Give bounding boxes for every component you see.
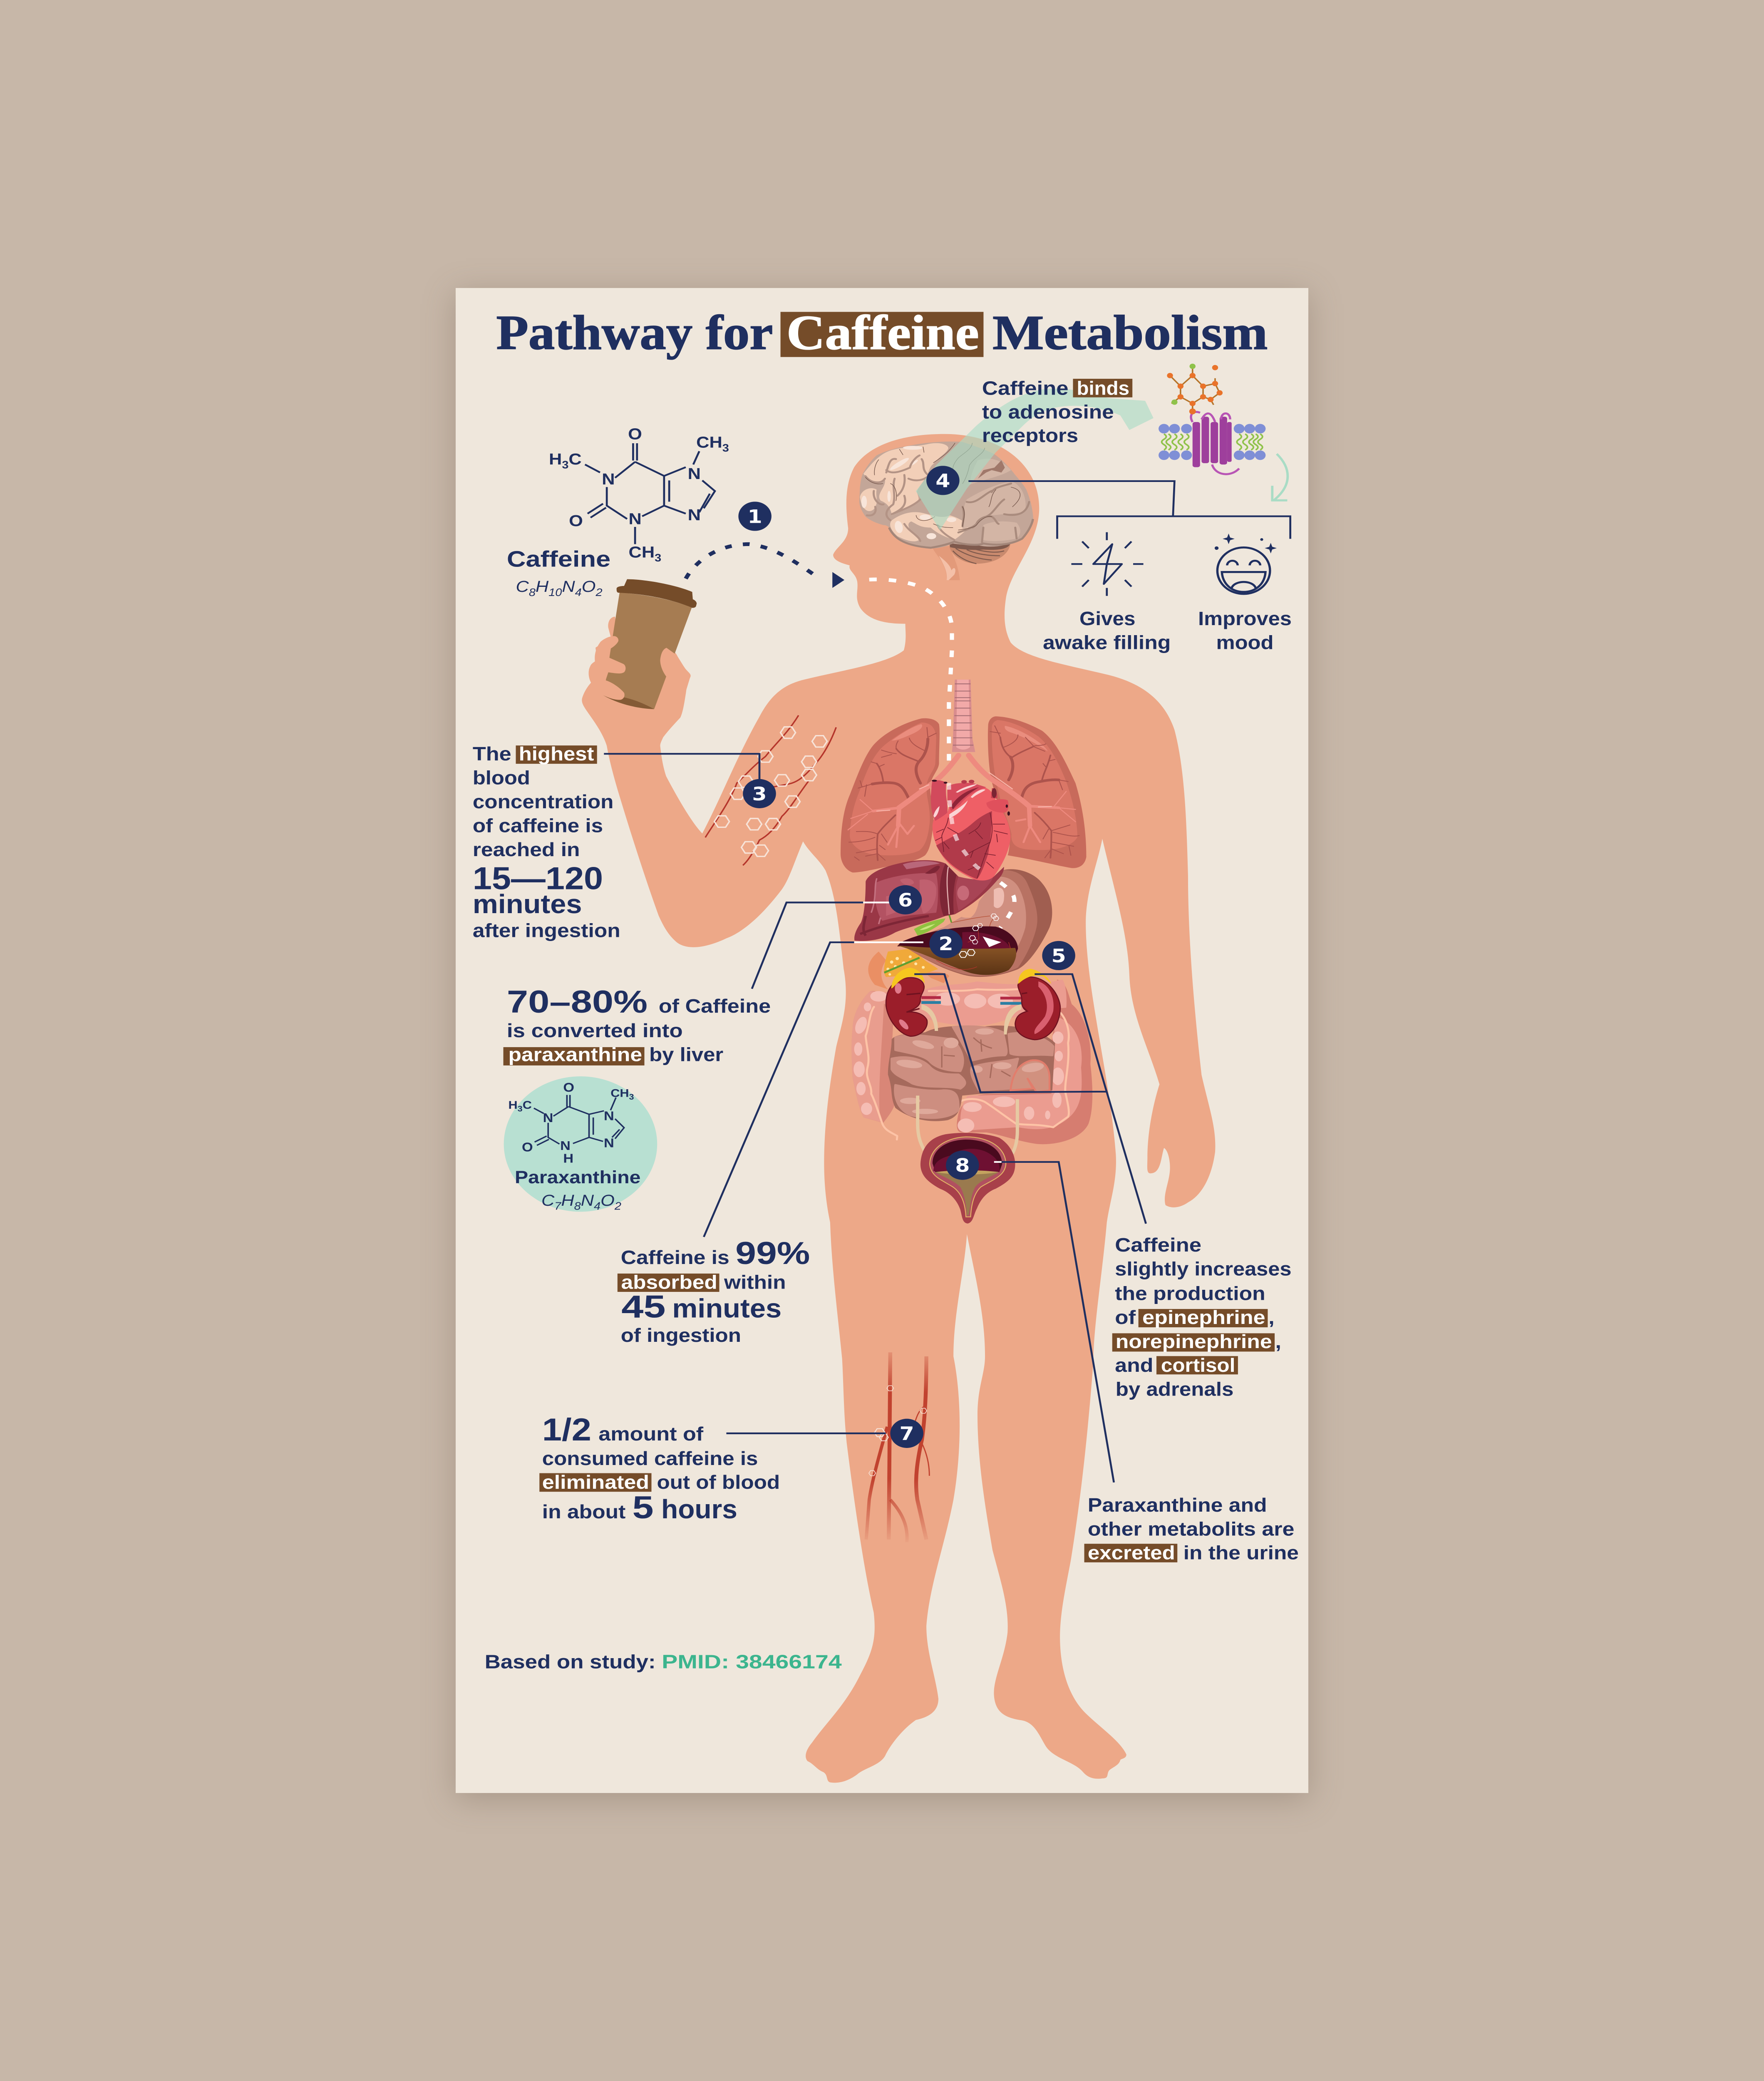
text: 70-80 percent converted bbox=[504, 984, 771, 1065]
text: half-life: in about bbox=[542, 1502, 625, 1522]
caffeine label and formula: 2 bbox=[595, 586, 603, 598]
text: adrenal hormones bbox=[1112, 1235, 1292, 1400]
text: half-life: eliminated bbox=[542, 1472, 649, 1493]
caffeine label and formula bbox=[507, 547, 610, 598]
panel: paraxanthine molecule: O bbox=[522, 1140, 533, 1154]
icon: smiling face bbox=[1215, 534, 1277, 594]
organ: stomach bbox=[897, 869, 1052, 977]
badge 2 bbox=[929, 929, 963, 958]
caffeine molecule structure: O bbox=[628, 425, 642, 443]
caffeine label and formula: 4 bbox=[575, 586, 582, 598]
icon: caffeine ball-and-stick molecule bbox=[1167, 364, 1223, 415]
organ: brain bbox=[859, 442, 1033, 580]
caffeine molecule structure: 3 bbox=[722, 442, 729, 454]
text: gives awake filling: Gives bbox=[1079, 608, 1135, 629]
panel: paraxanthine molecule: H bbox=[561, 1191, 574, 1209]
badge 1: 1 bbox=[748, 506, 762, 528]
panel: paraxanthine molecule: CH bbox=[610, 1087, 629, 1100]
badge 5: 5 bbox=[1052, 946, 1066, 967]
icon: adenosine receptor bbox=[1159, 412, 1265, 474]
text: half-life: 5 bbox=[633, 1490, 654, 1525]
panel: paraxanthine molecule: 3 bbox=[518, 1105, 523, 1113]
text: 99 percent absorbed: Caffeine is bbox=[621, 1247, 729, 1268]
badge 4 bbox=[926, 466, 960, 495]
caffeine label and formula: C bbox=[516, 578, 529, 596]
icon: lightning bolt with rays bbox=[1071, 532, 1144, 596]
arrow: swallowing path through the body bbox=[869, 579, 1015, 928]
caffeine molecule structure: O bbox=[569, 512, 583, 529]
arrow: receptor to effects bbox=[1272, 454, 1288, 500]
title: Caffeine bbox=[786, 306, 979, 360]
title: Metabolism bbox=[992, 306, 1268, 360]
caffeine molecule structure: N bbox=[629, 510, 642, 528]
text: highest blood concentration: blood bbox=[473, 767, 530, 789]
arm veins with caffeine molecules bbox=[705, 715, 836, 865]
text: caffeine binds to adenosine receptors: receptors bbox=[982, 425, 1078, 446]
caffeine molecule structure: N bbox=[688, 465, 701, 483]
text: half-life bbox=[539, 1412, 780, 1525]
organ: gallbladder bbox=[914, 915, 951, 936]
caffeine molecule structure: N bbox=[688, 506, 701, 524]
text: 70-80 percent converted: is converted into bbox=[507, 1021, 683, 1041]
panel: paraxanthine molecule: O bbox=[563, 1080, 574, 1094]
badge 1 bbox=[738, 502, 772, 531]
organ: heart bbox=[931, 780, 1010, 881]
text: 99 percent absorbed: 99% bbox=[735, 1236, 810, 1271]
panel: paraxanthine molecule: 2 bbox=[614, 1200, 621, 1212]
text: source citation bbox=[485, 1651, 842, 1673]
organ: pancreas and duodenum bbox=[868, 948, 949, 989]
panel: paraxanthine molecule: N bbox=[604, 1136, 614, 1150]
organ: bladder bbox=[920, 1133, 1015, 1224]
arrow: ingestion path from cup to mouth bbox=[686, 544, 844, 588]
text: caffeine binds to adenosine receptors: to adenosine bbox=[982, 402, 1114, 423]
text: gives awake filling bbox=[1043, 608, 1171, 653]
human body silhouette bbox=[582, 434, 1215, 1783]
panel: paraxanthine molecule: C bbox=[541, 1191, 554, 1209]
text: caffeine binds to adenosine receptors: binds bbox=[1077, 378, 1129, 399]
text: improves mood: Improves bbox=[1198, 608, 1292, 629]
panel: paraxanthine molecule: N bbox=[543, 1111, 553, 1125]
caffeine label and formula: Caffeine bbox=[507, 547, 610, 572]
text: excreted in urine bbox=[1084, 1495, 1299, 1564]
panel: paraxanthine molecule: N bbox=[581, 1191, 594, 1209]
panel: paraxanthine molecule: C bbox=[523, 1099, 532, 1112]
panel: paraxanthine molecule: N bbox=[560, 1139, 571, 1153]
badge 3: 3 bbox=[752, 784, 767, 805]
text: gives awake filling: awake filling bbox=[1043, 632, 1171, 653]
text: highest blood concentration: after ingestion bbox=[473, 920, 620, 941]
badge 7 bbox=[890, 1419, 923, 1448]
coffee cup in hand bbox=[590, 579, 697, 711]
text: highest blood concentration: minutes bbox=[473, 889, 582, 919]
caffeine label and formula: H bbox=[536, 578, 549, 596]
badge 6 bbox=[889, 885, 922, 914]
panel: paraxanthine molecule: 4 bbox=[594, 1200, 600, 1212]
text: half-life: hours bbox=[661, 1495, 737, 1524]
caffeine molecule structure: 3 bbox=[562, 459, 568, 471]
title: Pathway for bbox=[496, 306, 773, 360]
panel: paraxanthine molecule: N bbox=[604, 1109, 614, 1123]
text: 99 percent absorbed: absorbed bbox=[621, 1272, 717, 1293]
panel: paraxanthine molecule: Paraxanthine bbox=[515, 1167, 640, 1187]
text: caffeine binds to adenosine receptors bbox=[982, 378, 1132, 446]
text: adrenal hormones: , bbox=[1275, 1331, 1281, 1352]
panel: paraxanthine molecule: O bbox=[600, 1191, 615, 1209]
badge 7: 7 bbox=[900, 1423, 914, 1445]
text: adrenal hormones: norepinephrine bbox=[1116, 1331, 1272, 1352]
text: adrenal hormones: , bbox=[1268, 1307, 1275, 1328]
caffeine label and formula: N bbox=[562, 578, 575, 596]
caffeine molecule structure: CH bbox=[629, 543, 655, 561]
text: 70-80 percent converted: paraxanthine bbox=[508, 1044, 642, 1065]
text: highest blood concentration: highest bbox=[519, 744, 594, 765]
panel: paraxanthine molecule: 8 bbox=[574, 1200, 581, 1212]
text: 99 percent absorbed bbox=[618, 1236, 810, 1346]
text: half-life: 1/2 bbox=[542, 1412, 591, 1448]
text: highest blood concentration: concentration bbox=[473, 792, 613, 812]
text: 70-80 percent converted: 70–80% bbox=[507, 984, 648, 1020]
caffeine molecule structure: H bbox=[549, 450, 562, 468]
panel: paraxanthine molecule: H bbox=[563, 1151, 573, 1165]
text: excreted in urine: in the urine bbox=[1183, 1542, 1299, 1564]
text: excreted in urine: other metabolits are bbox=[1088, 1519, 1294, 1540]
caffeine molecule structure: 3 bbox=[655, 551, 661, 564]
badge 8: 8 bbox=[955, 1155, 970, 1177]
text: adrenal hormones: slightly increases bbox=[1115, 1259, 1292, 1280]
panel: paraxanthine molecule: 7 bbox=[554, 1200, 561, 1212]
connector: brain to effects bbox=[968, 481, 1290, 539]
panel: paraxanthine molecule: 3 bbox=[629, 1093, 634, 1102]
text: improves mood bbox=[1198, 608, 1292, 653]
title bbox=[496, 306, 1268, 360]
panel: paraxanthine molecule bbox=[504, 1076, 657, 1212]
text: adrenal hormones: by adrenals bbox=[1116, 1379, 1233, 1400]
text: adrenal hormones: of bbox=[1115, 1307, 1136, 1328]
organ: kidneys with adrenal glands bbox=[886, 968, 1060, 1040]
text: source citation: PMID: 38466174 bbox=[662, 1651, 842, 1673]
panel: infographic card bbox=[456, 288, 1308, 1793]
organ: small intestine bbox=[888, 1026, 1055, 1121]
text: improves mood: mood bbox=[1216, 632, 1274, 653]
badge 8 bbox=[946, 1151, 979, 1180]
text: highest blood concentration bbox=[473, 744, 620, 941]
text: adrenal hormones: and bbox=[1115, 1355, 1153, 1376]
text: excreted in urine: Paraxanthine and bbox=[1088, 1495, 1267, 1516]
text: adrenal hormones: the production bbox=[1115, 1283, 1265, 1304]
organ: lungs and trachea bbox=[841, 680, 1086, 872]
caffeine molecule structure bbox=[549, 425, 729, 564]
leg veins bbox=[866, 1352, 929, 1542]
text: source citation: Based on study: bbox=[485, 1651, 656, 1673]
badge 6: 6 bbox=[898, 890, 913, 911]
text: 70-80 percent converted: by liver bbox=[649, 1044, 723, 1065]
caffeine label and formula: 8 bbox=[529, 586, 536, 598]
text: adrenal hormones: Caffeine bbox=[1115, 1235, 1201, 1256]
text: caffeine binds to adenosine receptors: Caffeine bbox=[982, 378, 1069, 399]
text: 99 percent absorbed: of ingestion bbox=[621, 1325, 741, 1346]
text: adrenal hormones: cortisol bbox=[1161, 1355, 1235, 1376]
badge 4: 4 bbox=[935, 470, 950, 492]
caffeine molecule structure: C bbox=[568, 450, 582, 468]
text: 70-80 percent converted: of Caffeine bbox=[659, 996, 771, 1017]
text: 99 percent absorbed: 45 bbox=[621, 1289, 665, 1324]
panel: paraxanthine molecule: H bbox=[508, 1099, 518, 1112]
organ: liver bbox=[854, 860, 1004, 941]
connector lines bbox=[604, 754, 1146, 1483]
text: adrenal hormones: epinephrine bbox=[1142, 1307, 1265, 1328]
text: highest blood concentration: of caffeine is bbox=[473, 815, 603, 837]
text: highest blood concentration: The bbox=[473, 744, 511, 765]
badge 5 bbox=[1042, 941, 1075, 970]
text: 99 percent absorbed: within bbox=[724, 1272, 786, 1293]
text: highest blood concentration: reached in bbox=[473, 839, 580, 860]
caffeine molecule structure: N bbox=[602, 470, 615, 488]
text: half-life: consumed caffeine is bbox=[542, 1448, 758, 1469]
caffeine label and formula: 10 bbox=[548, 586, 562, 598]
badge 2: 2 bbox=[938, 934, 953, 955]
text: half-life: out of blood bbox=[657, 1472, 780, 1493]
text: excreted in urine: excreted bbox=[1088, 1542, 1175, 1564]
caffeine label and formula: O bbox=[582, 578, 595, 596]
text: highest blood concentration: 15—120 bbox=[473, 861, 603, 896]
arrow: teal stream from brain to receptor bbox=[916, 389, 1154, 530]
organ: ureters bbox=[918, 1095, 1017, 1154]
text: 99 percent absorbed: minutes bbox=[672, 1294, 782, 1324]
badge 3 bbox=[743, 779, 776, 808]
text: half-life: amount of bbox=[598, 1424, 704, 1445]
organ: large intestine bbox=[851, 980, 1092, 1144]
caffeine molecule structure: CH bbox=[696, 433, 722, 451]
